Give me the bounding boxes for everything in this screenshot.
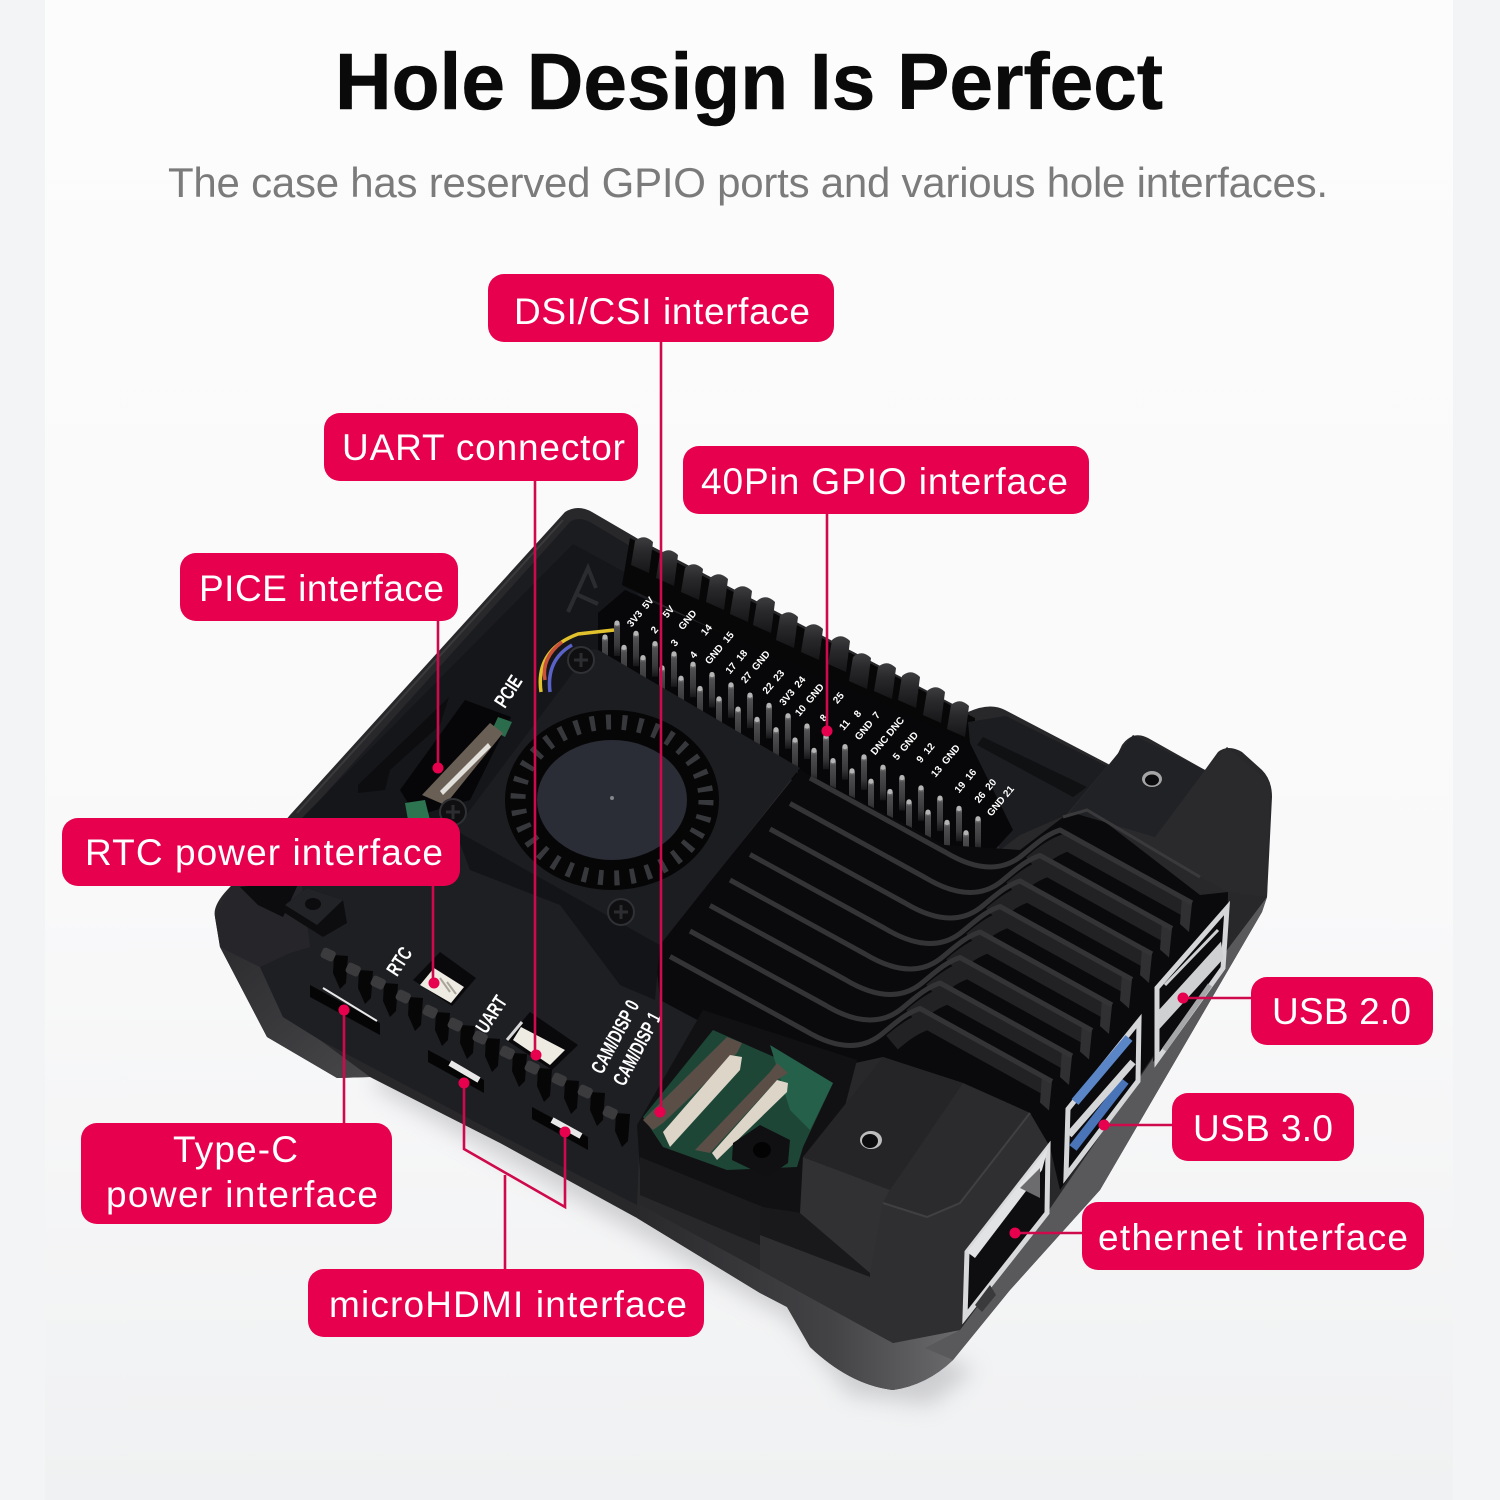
label: USB 2.0: USB 2.0 bbox=[1272, 991, 1411, 1032]
GPIO pin labels: 13 GND bbox=[929, 743, 963, 780]
heatsink fin end walls bbox=[1040, 897, 1192, 1110]
label: ethernet interface bbox=[1082, 1202, 1424, 1270]
leader: DSI/CSI bbox=[654, 340, 666, 1118]
leader: UART bbox=[530, 480, 542, 1060]
lower bottom shell bbox=[637, 1203, 960, 1390]
label: RTC power interface bbox=[62, 818, 460, 886]
screw post bbox=[285, 888, 347, 937]
top edge fins bbox=[631, 537, 969, 737]
label: USB 3.0: USB 3.0 bbox=[1193, 1108, 1333, 1149]
label: UART connector bbox=[324, 413, 638, 481]
ethernet port bbox=[965, 1148, 1048, 1317]
case body silhouette bbox=[215, 508, 1272, 1390]
GPIO pin labels: GND 21 bbox=[985, 784, 1017, 819]
label: USB 3.0 bbox=[1172, 1093, 1354, 1161]
label: ethernet interface: ethernet interface bbox=[1098, 1217, 1408, 1258]
label: Type-C power interface bbox=[81, 1123, 392, 1224]
label: DSI/CSI interface: DSI/CSI interface bbox=[514, 291, 810, 332]
label: 40Pin GPIO interface: 40Pin GPIO interface bbox=[701, 461, 1068, 502]
port: UART connector bbox=[506, 1012, 578, 1070]
logo recess bbox=[568, 568, 598, 612]
GPIO pin labels: DNC DNC bbox=[869, 715, 907, 758]
label: Type-C power interface: power interface bbox=[106, 1174, 378, 1215]
left lower side panel bbox=[220, 947, 370, 1078]
GPIO pin labels: 3 bbox=[669, 637, 681, 649]
USB 3.0 ports bbox=[1063, 1018, 1140, 1180]
GPIO pin labels: 8 bbox=[818, 712, 830, 724]
FPC connector 0 bbox=[643, 1037, 742, 1130]
label: 40Pin GPIO interface bbox=[683, 446, 1089, 514]
label: UART connector: UART connector bbox=[342, 427, 625, 468]
GPIO pin labels: 3V3 5V bbox=[625, 595, 657, 630]
right grey lip bbox=[925, 897, 1267, 1360]
GPIO pin labels: 27 GND bbox=[739, 649, 773, 686]
leader: PCIE bbox=[432, 620, 444, 774]
leader: ethernet bbox=[1010, 1228, 1083, 1238]
GPIO pin labels: 10 GND bbox=[793, 682, 827, 719]
cooling fan bbox=[440, 647, 800, 1000]
label: microHDMI interface: microHDMI interface bbox=[329, 1284, 687, 1325]
GPIO pin labels: 8 bbox=[852, 708, 864, 720]
leader: USB 2.0 bbox=[1178, 992, 1252, 1004]
heatsink right fin faces bbox=[892, 842, 1187, 1086]
label: PICE interface: PICE interface bbox=[199, 568, 444, 609]
front strip below board bbox=[640, 1157, 800, 1262]
wires bbox=[540, 630, 614, 692]
silkscreen: RTC: RTC bbox=[382, 942, 417, 980]
front recess bbox=[760, 1207, 870, 1277]
product: Raspberry Pi case bbox=[215, 508, 1272, 1390]
fan plate bbox=[455, 649, 800, 945]
port: RTC connector bbox=[413, 952, 476, 1006]
label: PICE interface bbox=[180, 553, 458, 621]
silkscreen: PCIE: PCIE bbox=[489, 671, 527, 712]
GPIO pin labels: 17 18 bbox=[724, 648, 751, 677]
leader: Type-C bbox=[338, 1004, 350, 1124]
fan opening bbox=[505, 710, 719, 890]
leader: RTC bbox=[428, 885, 440, 988]
case drop shadow bbox=[370, 1060, 975, 1405]
front corner block bbox=[760, 1057, 1050, 1343]
fan screws bbox=[440, 647, 634, 925]
GPIO pins bbox=[602, 620, 981, 866]
silkscreen: CAM/DISP 1: CAM/DISP 1 bbox=[608, 1008, 666, 1089]
block top bbox=[803, 1057, 963, 1190]
block shoulder bbox=[883, 1083, 1030, 1217]
leader: microHDMI bbox=[458, 1078, 570, 1336]
fan hub bbox=[537, 740, 687, 860]
label: DSI/CSI interface bbox=[488, 274, 834, 342]
GPIO pin labels: 25 bbox=[831, 690, 847, 706]
title: Hole Design Is Perfect bbox=[335, 37, 1163, 126]
mounting post bbox=[732, 1125, 790, 1177]
GPIO pin labels: 11 bbox=[837, 717, 853, 733]
USB 2.0 ports bbox=[1153, 905, 1227, 1062]
top panel left rim bbox=[240, 519, 700, 888]
GPIO pin labels: GND 15 bbox=[703, 630, 737, 667]
camera connector board bbox=[637, 1010, 857, 1262]
leader lines and dots bbox=[338, 340, 1252, 1336]
GPIO pin labels: 4 bbox=[688, 649, 700, 661]
leader: 40Pin GPIO bbox=[822, 512, 832, 736]
FPC connector 1 bbox=[695, 1063, 788, 1153]
label: Type-C power interface: Type-C bbox=[173, 1129, 298, 1170]
bottom-left plate bbox=[260, 825, 704, 1205]
front vent fins bbox=[320, 947, 630, 1147]
GPIO pin labels: 9 12 bbox=[915, 741, 938, 765]
label: USB 2.0 bbox=[1251, 977, 1433, 1045]
top edge fin slot bbox=[622, 538, 975, 755]
fan blades bbox=[518, 722, 706, 878]
GPIO pin labels: GND 7 bbox=[853, 710, 883, 743]
silkscreen: CAM/DISP 0: CAM/DISP 0 bbox=[586, 996, 644, 1077]
leader: USB 3.0 bbox=[1098, 1120, 1173, 1130]
GPIO plate bbox=[598, 590, 1013, 860]
subtitle: The case has reserved GPIO ports and various hole interfaces. bbox=[168, 159, 1328, 206]
block front face bbox=[800, 1157, 890, 1273]
GPIO pin labels bbox=[625, 595, 1017, 819]
heatsink grooves bbox=[655, 770, 1228, 1190]
label: RTC power interface: RTC power interface bbox=[85, 832, 443, 873]
label: microHDMI interface bbox=[308, 1269, 704, 1337]
PCIE recess bbox=[400, 700, 511, 816]
GPIO top right surface bbox=[968, 716, 1107, 850]
body front bbox=[760, 1113, 1050, 1343]
port: Type-C bbox=[310, 985, 380, 1035]
PCIE connector bbox=[405, 717, 512, 820]
GPIO pin labels: 5V bbox=[661, 604, 677, 621]
heatsink ridges bbox=[670, 778, 1192, 1082]
silkscreen: UART: UART bbox=[471, 991, 512, 1037]
GPIO pin labels: GND bbox=[677, 608, 699, 632]
port: micro HDMI 1 bbox=[532, 1107, 588, 1150]
fan base bbox=[455, 830, 660, 1000]
left rim bbox=[215, 870, 310, 967]
GPIO pin labels: 26 20 bbox=[973, 777, 1000, 806]
upper right corner block bbox=[1063, 735, 1270, 897]
GPIO pin labels: 5 GND bbox=[891, 730, 921, 763]
GPIO pin labels: 3V3 24 bbox=[778, 674, 809, 708]
SD card shadow bbox=[358, 697, 449, 793]
port: micro HDMI 0 bbox=[428, 1050, 484, 1093]
GPIO pin labels: 2 bbox=[649, 624, 661, 636]
GPIO pin labels: 19 16 bbox=[953, 767, 980, 796]
corner well bbox=[240, 880, 300, 917]
GPIO pin labels: 22 23 bbox=[761, 668, 788, 697]
GPIO pin labels: 14 bbox=[699, 622, 715, 638]
